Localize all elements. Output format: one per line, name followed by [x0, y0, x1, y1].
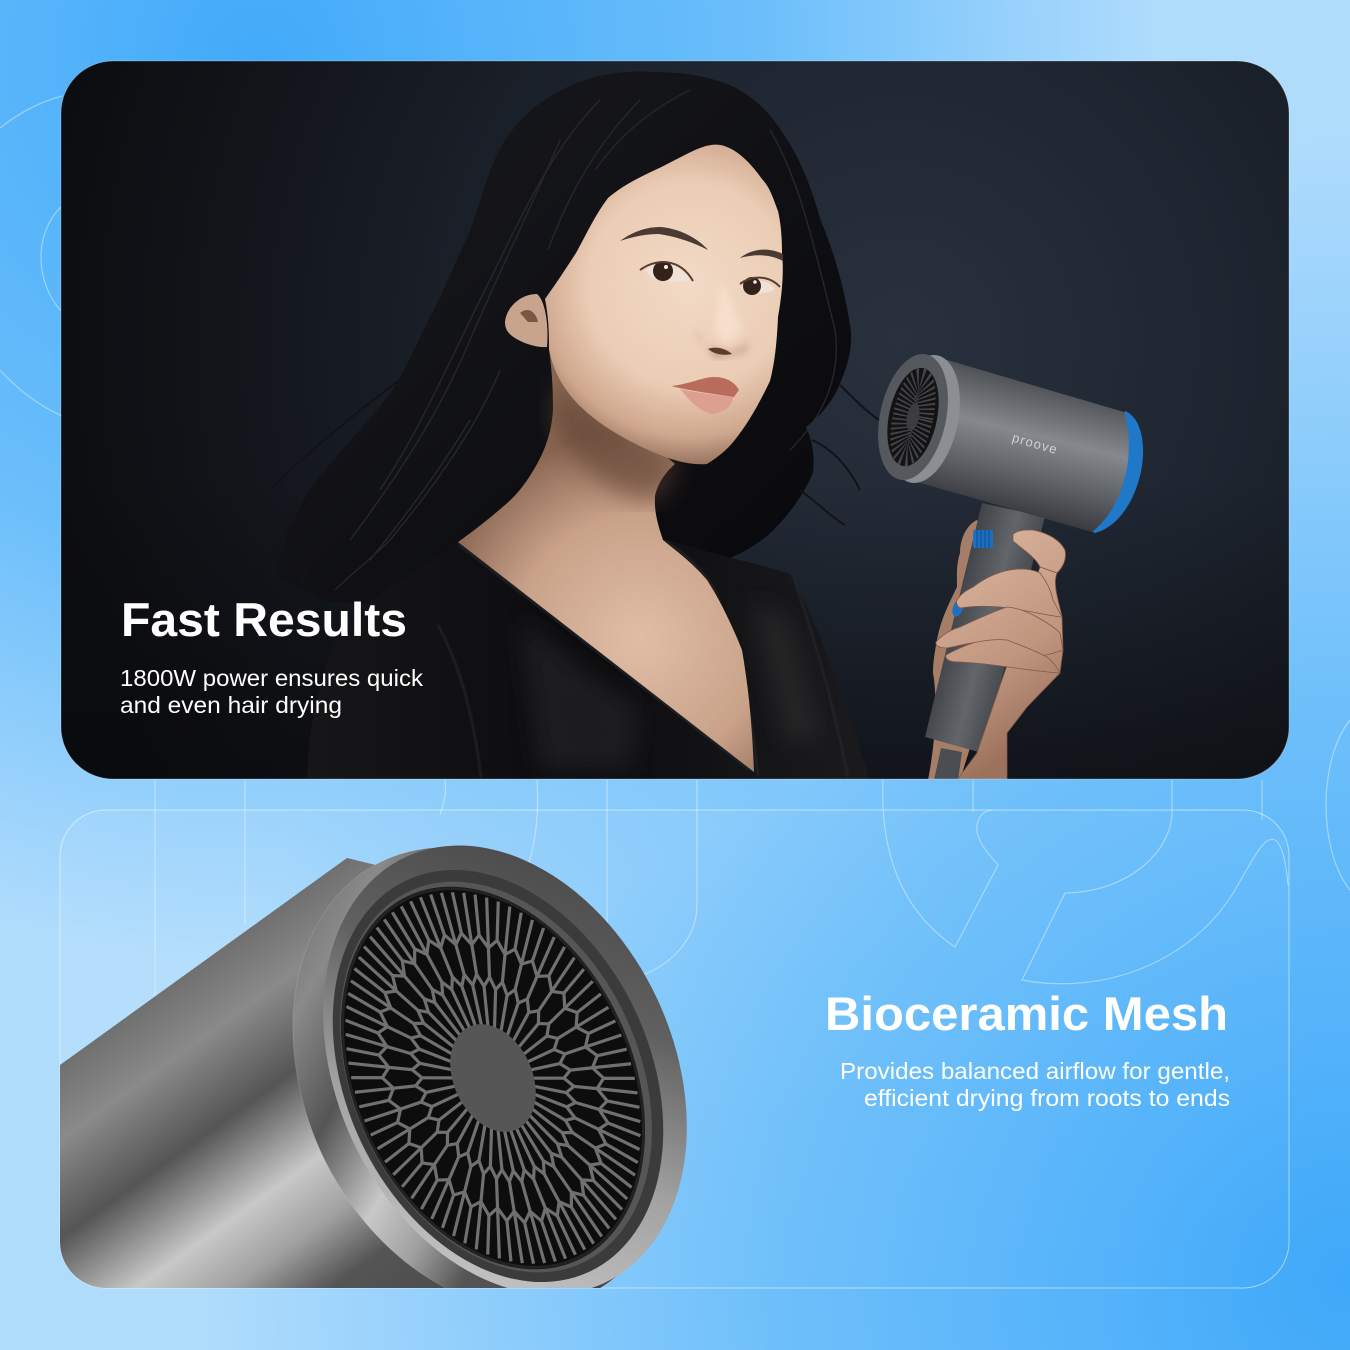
panel: bioceramic mesh	[60, 810, 1290, 1288]
dryer shoulder	[292, 848, 618, 1288]
eyebrows	[620, 227, 783, 261]
dryer mesh	[887, 368, 939, 466]
dryer handle	[925, 503, 1045, 753]
dress	[307, 540, 869, 780]
face	[545, 145, 783, 464]
blue button	[952, 601, 964, 617]
dryer outer rim	[323, 846, 687, 1288]
dryer front ring	[878, 354, 948, 480]
logo: proove	[1011, 430, 1060, 457]
neck shadow	[553, 385, 680, 500]
dryer back cap	[1092, 411, 1144, 533]
hair front strands	[335, 90, 836, 590]
dryer inner recess	[332, 870, 664, 1282]
description: fast results: and even hair drying	[120, 692, 342, 718]
hand back	[928, 520, 978, 779]
lips	[671, 377, 739, 414]
dryer barrel	[60, 858, 446, 1288]
hair back	[276, 71, 851, 610]
dress sheen	[438, 541, 848, 778]
heading: fast results: Fast Results	[121, 593, 407, 646]
eyes	[640, 261, 780, 295]
panel: fast results photo	[61, 61, 1289, 780]
nose	[706, 292, 750, 361]
hand fingers	[936, 530, 1065, 780]
heading: bioceramic mesh: Bioceramic Mesh	[825, 987, 1228, 1040]
neck and chest	[458, 349, 754, 772]
dial	[973, 530, 993, 548]
description: bioceramic mesh: efficient drying from roots to ends	[864, 1085, 1230, 1111]
description: fast results	[120, 665, 424, 718]
woman portrait	[268, 71, 890, 780]
mesh grille	[341, 886, 645, 1270]
dryer cord	[934, 748, 962, 780]
dryer front band	[904, 355, 960, 483]
dryer body	[910, 357, 1129, 532]
description: bioceramic mesh: Provides balanced airflow for gentle,	[840, 1058, 1230, 1084]
description: bioceramic mesh	[840, 1058, 1230, 1111]
description: fast results: 1800W power ensures quick	[120, 665, 424, 691]
large dryer close-up	[60, 846, 687, 1288]
hair dryer with hand	[867, 348, 1143, 780]
ear	[505, 294, 548, 347]
hair wisps	[304, 380, 880, 526]
